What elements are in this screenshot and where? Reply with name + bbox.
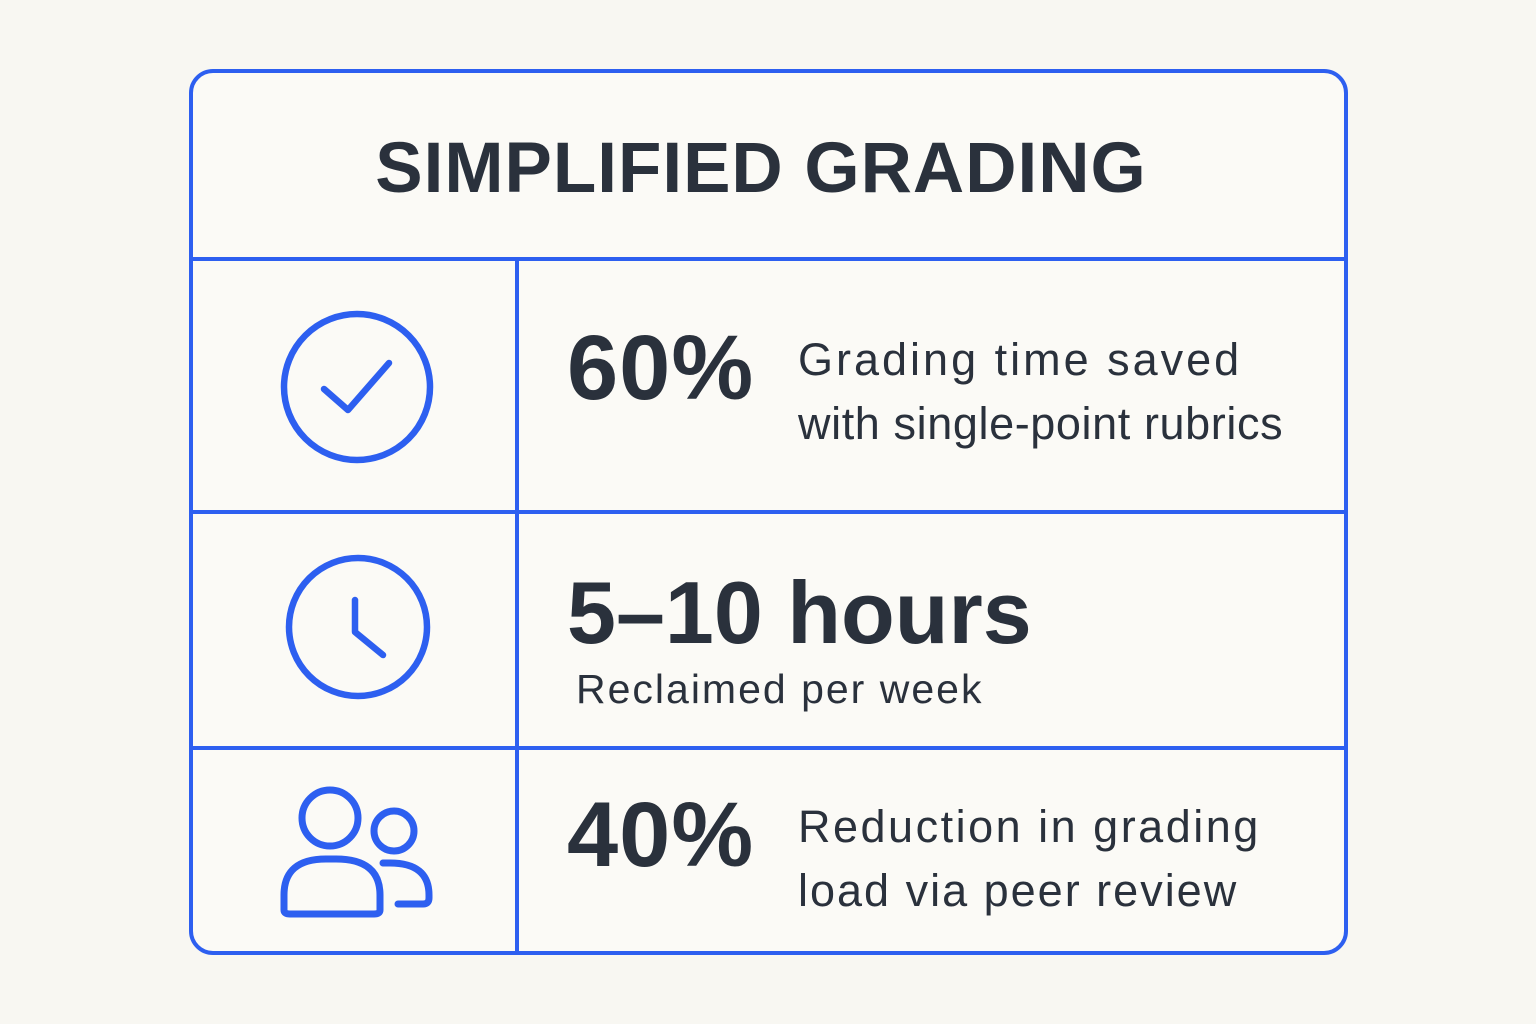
icon: check circle xyxy=(280,310,434,464)
row 1 text: with single-point rubrics xyxy=(798,398,1283,449)
row 2 stat: 5–10 hours xyxy=(567,563,1032,662)
row 1 text: Grading time saved xyxy=(798,334,1242,385)
row 2 text: Reclaimed per week xyxy=(576,666,983,712)
icon: users xyxy=(280,786,432,918)
row 3 text xyxy=(798,801,1261,916)
row 3 stat: 40% xyxy=(567,784,754,886)
row 1 text xyxy=(798,334,1283,449)
row 3 text: load via peer review xyxy=(798,865,1238,916)
icon: clock xyxy=(286,554,430,700)
title: SIMPLIFIED GRADING xyxy=(375,129,1147,208)
row 1 stat: 60% xyxy=(567,317,754,419)
row 3 text: Reduction in grading xyxy=(798,801,1261,852)
